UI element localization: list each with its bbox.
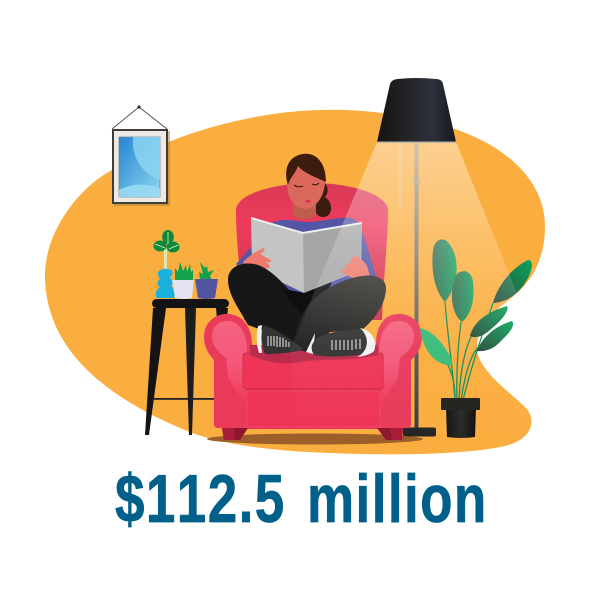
background blob <box>45 110 545 454</box>
plant in blue vase <box>154 230 180 298</box>
armchair legs <box>222 428 403 440</box>
amount heading: $112.5 <box>115 461 286 536</box>
armchair arms <box>204 314 422 428</box>
eyes and lips <box>294 183 319 202</box>
potted plant <box>420 239 532 438</box>
lamp shade <box>377 78 456 142</box>
woman's neck <box>293 200 316 219</box>
amount heading: million <box>307 461 488 536</box>
sneakers <box>257 325 375 357</box>
armchair back <box>236 183 388 320</box>
plant in blue pot <box>195 262 218 299</box>
woman's shirt <box>236 218 376 300</box>
chair shadow <box>207 434 423 444</box>
side table <box>145 299 229 435</box>
plant in white pot <box>172 262 194 299</box>
woman's face <box>287 163 325 209</box>
armchair seat cushion and front <box>243 345 383 429</box>
open newspaper <box>251 217 362 293</box>
lamp light cone <box>290 142 540 440</box>
woman's hands <box>243 248 371 280</box>
woman's hair back and ponytail <box>315 180 331 217</box>
picture frame <box>112 105 170 206</box>
floor lamp pole and base <box>400 142 436 436</box>
woman's hair <box>286 154 326 185</box>
woman's legs in black trousers <box>228 264 386 352</box>
amount heading <box>115 461 488 536</box>
